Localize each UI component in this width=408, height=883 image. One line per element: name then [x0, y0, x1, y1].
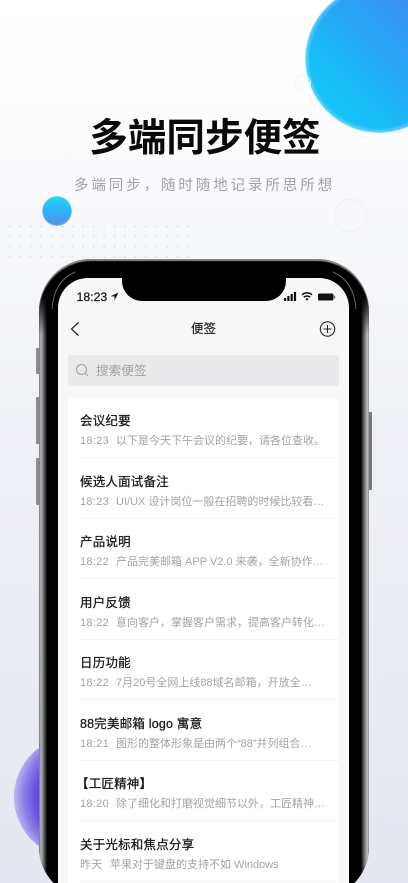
ring right — [334, 199, 367, 232]
note 3: 产品说明 — [80, 535, 131, 549]
notch — [122, 277, 286, 301]
icon: search — [76, 364, 88, 376]
note 6 — [80, 716, 339, 761]
note 3: 产品完美邮箱 APP V2.0 来袭，全新协作… — [116, 556, 324, 568]
note 8: 昨天 — [80, 858, 103, 870]
small blue circle — [42, 196, 72, 226]
small ring top — [295, 75, 311, 91]
note 5 — [80, 656, 339, 700]
phone — [36, 259, 372, 883]
note 2 — [80, 474, 339, 519]
status time: 18:23 — [76, 290, 107, 304]
title: 多端同步便签 — [89, 117, 321, 160]
dot grid — [7, 224, 193, 261]
note 8 — [80, 838, 339, 882]
nav title: 便签 — [191, 322, 216, 336]
subtitle: 多端同步，随时随地记录所思所想 — [74, 178, 335, 194]
icon: back — [70, 322, 79, 336]
note 1: 会议纪要 — [80, 414, 131, 428]
purple circle — [14, 736, 136, 858]
note list — [68, 397, 339, 883]
power button — [368, 412, 372, 490]
status icons — [284, 292, 336, 301]
note 8: 关于光标和焦点分享 — [80, 838, 194, 852]
note 8: 苹果对于键盘的支持不如 Windows — [110, 858, 279, 870]
left bezel edge — [39, 295, 47, 883]
note 2: 18:23 — [80, 496, 109, 508]
note 7: 18:20 — [80, 798, 109, 810]
note 1 — [80, 414, 339, 458]
note 6: 88完美邮箱 logo 寓意 — [80, 716, 202, 730]
corner highlights — [52, 272, 356, 309]
right bezel edge — [361, 295, 369, 883]
note 2: 候选人面试备注 — [80, 474, 169, 488]
search bar — [68, 355, 339, 386]
search placeholder: 搜索便签 — [96, 364, 147, 378]
icon: location arrow — [110, 292, 118, 300]
note 6: 18:21 — [80, 738, 109, 750]
note 6: 图形的整体形象是由两个“88”并列组合… — [116, 738, 312, 750]
note 4: 意向客户，掌握客户需求，提高客户转化… — [116, 616, 325, 628]
note 2: UI/UX 设计岗位一般在招聘的时候比较看… — [116, 496, 324, 508]
note 7 — [76, 777, 339, 821]
note 5: 日历功能 — [80, 656, 131, 670]
icon: add — [320, 321, 336, 337]
note 1: 以下是今天下午会议的纪要，请各位查收。 — [116, 435, 325, 447]
side buttons — [36, 348, 39, 505]
note 7: 除了细化和打磨视觉细节以外，工匠精神… — [116, 798, 325, 810]
background arc — [0, 100, 110, 240]
note 7: 【工匠精神】 — [76, 777, 152, 791]
note 1: 18:23 — [80, 435, 109, 447]
note 4 — [80, 596, 339, 640]
note 4: 用户反馈 — [80, 596, 131, 610]
phone body — [39, 259, 369, 883]
big blue circle — [305, 0, 408, 133]
note 3: 18:22 — [80, 556, 109, 568]
note 3 — [80, 535, 339, 579]
note 4: 18:22 — [80, 616, 109, 628]
screen — [58, 278, 349, 883]
note 5: 7月20号全网上线88域名邮箱，开放全… — [116, 677, 312, 689]
note 5: 18:22 — [80, 677, 109, 689]
